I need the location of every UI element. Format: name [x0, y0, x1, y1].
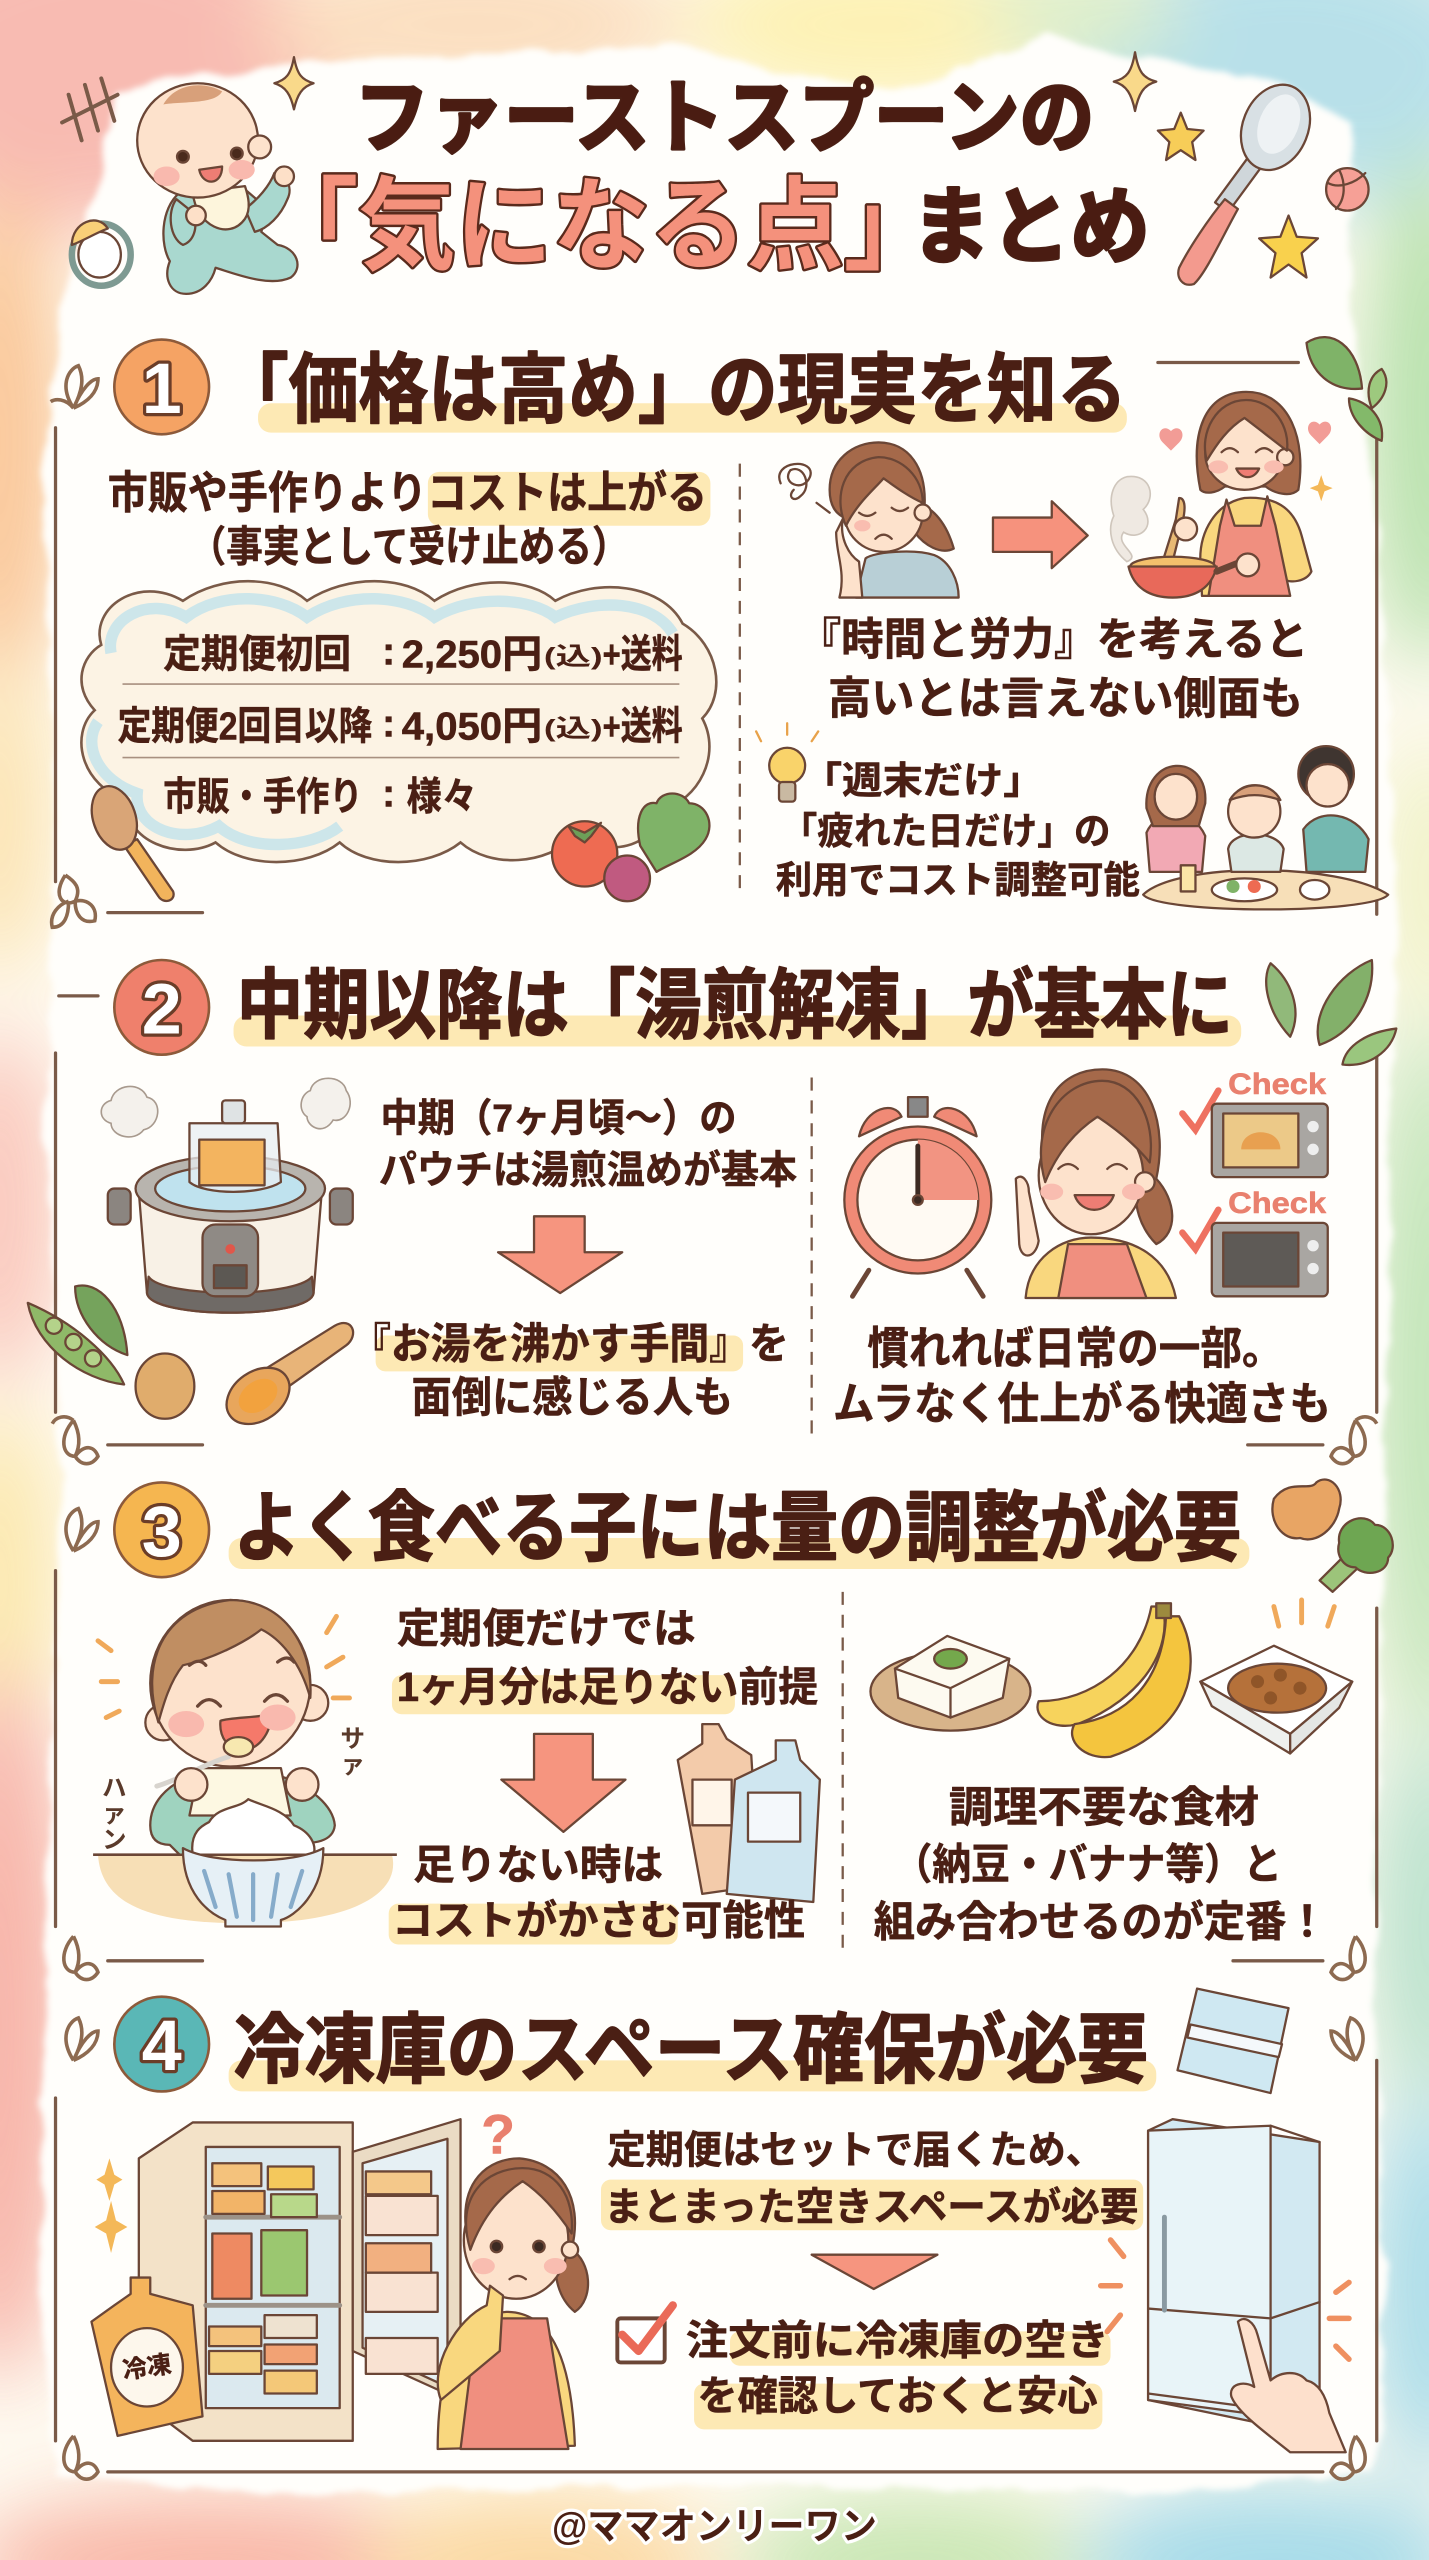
row 2: 定期便2回目以降 — [118, 706, 372, 749]
icon: pouches — [678, 1724, 820, 1902]
text: pouch: パウチは湯煎温めが基本 — [379, 1150, 797, 1193]
check microwave 2: Check — [1228, 1187, 1327, 1220]
divider — [842, 1592, 844, 1951]
price cloud — [81, 581, 716, 862]
row 3: 市販・手作り — [163, 776, 363, 819]
icon: family meal — [1143, 746, 1388, 909]
icon: broccoli — [1320, 1518, 1393, 1592]
highlight — [601, 2180, 1143, 2230]
number badge 3: 3 — [142, 1492, 182, 1572]
heading 4: 冷凍庫のスペース確保が必要 — [234, 2009, 1148, 2094]
text: boiling effort: 『お湯を沸かす手間』を — [351, 1320, 789, 1367]
icon: rice bowl — [183, 1799, 323, 1927]
divider — [811, 1078, 813, 1433]
text: troublesome: 面倒に感じる人も — [412, 1374, 733, 1421]
row 2: : — [382, 702, 395, 745]
heading 2: 中期以降は「湯煎解凍」が基本に — [237, 964, 1233, 1049]
icon: alarm clock — [844, 1097, 991, 1296]
icon: thinking woman — [438, 2158, 588, 2449]
saa: サ — [341, 1726, 365, 1753]
saa: ァ — [341, 1752, 365, 1779]
highlight — [376, 1336, 743, 1371]
row 1: : — [382, 630, 395, 673]
icon: steam clouds — [101, 1078, 350, 1137]
highlight — [389, 1904, 678, 1944]
row 3: 様々 — [407, 776, 477, 819]
section 2 — [28, 960, 1396, 1445]
haan: ァ — [102, 1801, 127, 1828]
section 1 frame — [56, 362, 1377, 914]
icon: frozen pouch — [91, 2278, 203, 2436]
row 1: (込) — [544, 642, 603, 670]
haan: ン — [102, 1827, 127, 1854]
leaves — [1266, 960, 1396, 1065]
attention marks — [1101, 2240, 1349, 2359]
leaves — [1307, 337, 1386, 441]
row 1: 定期便初回 — [163, 634, 351, 677]
number badge 4 — [114, 1997, 209, 2091]
row 2: 4,050円 — [402, 706, 542, 749]
arrow down — [498, 1216, 622, 1293]
frame ornaments — [51, 366, 1377, 2479]
sparkle marks — [1274, 1600, 1334, 1626]
row 1 — [163, 630, 683, 677]
title highlighted words: 「気になる点」 — [261, 170, 941, 283]
section 2 frame — [56, 996, 1377, 1445]
title line 2 suffix: まとめ — [911, 179, 1150, 274]
row 2 — [118, 702, 683, 749]
heading highlight — [234, 1016, 1241, 1047]
row 1: +送料 — [603, 634, 683, 677]
arrow down — [501, 1734, 625, 1832]
text: delivered as set: 定期便はセットで届くため、 — [608, 2129, 1104, 2172]
icon: table — [93, 1855, 397, 1923]
row 1: 2,250円 — [402, 634, 542, 677]
icon: fridge — [1148, 2119, 1320, 2429]
check microwave 1: Check — [1228, 1068, 1327, 1101]
icon: rattle lines — [62, 78, 118, 140]
section 4 — [56, 1989, 1377, 2472]
text: subscription only: 定期便だけでは — [397, 1605, 696, 1651]
text: accept as fact: （事実として受け止める） — [189, 524, 629, 571]
sparkle marks — [98, 1616, 349, 1718]
icon: open freezer — [139, 2119, 461, 2441]
icon: spoon — [1178, 74, 1322, 285]
highlight — [730, 2331, 1111, 2366]
sparkles — [95, 2158, 127, 2253]
text: routine: 慣れれば日常の一部。 — [867, 1324, 1284, 1373]
icon: rice cooker — [108, 1100, 353, 1313]
credit: @ママオンリーワン — [552, 2505, 877, 2547]
text: not expensive: 高いとは言えない側面も — [828, 674, 1303, 723]
text: one month: 1ヶ月分は足りない前提 — [397, 1664, 818, 1710]
icon: stress squiggle — [779, 464, 830, 513]
number badge 1 — [114, 340, 209, 434]
row 2: +送料 — [603, 706, 683, 749]
highlight — [392, 1675, 735, 1714]
section 4 frame — [56, 2060, 1377, 2472]
icon: baby — [137, 83, 297, 294]
icon: bulb — [756, 723, 818, 802]
row 2: (込) — [544, 714, 603, 742]
check microwave 2 — [1182, 1187, 1328, 1296]
row 3: : — [382, 773, 395, 816]
text: natto banana: （納豆・バナナ等）と — [893, 1841, 1282, 1888]
row 3 — [163, 773, 477, 819]
section 3 — [56, 1480, 1393, 1961]
number badge 3 — [114, 1482, 209, 1577]
heading 1: 「価格は高め」の現実を知る — [219, 348, 1127, 433]
icon: question mark: ? — [481, 2103, 515, 2165]
icon: pointing hand — [1231, 2319, 1346, 2452]
arrow triangle — [812, 2255, 937, 2289]
icon: sparkles and stars — [274, 52, 1369, 278]
heading highlight — [229, 2060, 1156, 2091]
onomatopoeia — [102, 1726, 365, 1854]
text: not enough: 足りない時は — [413, 1842, 663, 1888]
icon: pacifier — [72, 220, 131, 286]
icon: cooking woman — [1129, 392, 1311, 598]
section 3 frame — [56, 1571, 1377, 1961]
icon: hearts — [1159, 422, 1333, 501]
divider — [739, 464, 741, 895]
arrow right — [993, 501, 1088, 568]
icon: pea pod and leaf — [28, 1286, 127, 1384]
number badge 1: 1 — [142, 349, 182, 429]
title line 1: ファーストスプーンの — [354, 73, 1094, 162]
number badge 2: 2 — [142, 969, 182, 1049]
text: standard combo: 組み合わせるのが定番！ — [874, 1898, 1328, 1945]
text: evenly finished: ムラなく仕上がる快適さも — [833, 1380, 1331, 1429]
heading highlight — [258, 403, 1127, 433]
icon: steam — [1111, 476, 1150, 562]
title — [261, 73, 1150, 283]
icon: potato — [136, 1353, 194, 1419]
icon: tomato and radish — [552, 793, 709, 901]
icon: natto — [1200, 1646, 1352, 1753]
icon: bananas — [1037, 1603, 1191, 1757]
icon: tired woman — [830, 442, 959, 598]
text: tired days: 「疲れた日だけ」の — [781, 810, 1111, 852]
number badge 4: 4 — [142, 2006, 182, 2086]
text: weekends: 「週末だけ」 — [802, 759, 1044, 801]
haan: ハ — [102, 1775, 127, 1802]
check microwave 1 — [1182, 1068, 1328, 1177]
text: mid stage: 中期（7ヶ月頃〜）の — [381, 1097, 737, 1140]
text: time and labor: 『時間と労力』を考えると — [799, 616, 1308, 665]
text: cost goes up: 市販や手作りよりコストは上がる — [108, 469, 707, 518]
heading highlight — [229, 1538, 1249, 1569]
text: cost adjust: 利用でコスト調整可能 — [776, 859, 1140, 901]
icon: eating baby — [145, 1600, 335, 1855]
text: no cooking: 調理不要な食材 — [949, 1784, 1259, 1831]
section 1 — [56, 337, 1388, 914]
icon: frozen pack — [1177, 1989, 1289, 2093]
text: costly: コストがかさむ可能性 — [392, 1898, 805, 1944]
number badge 2 — [114, 960, 209, 1055]
icon: checkbox — [617, 2305, 673, 2362]
cloud shape — [81, 581, 716, 862]
text: check before order: 注文前に冷凍庫の空き — [686, 2317, 1109, 2363]
icon: wooden spoon — [84, 780, 174, 901]
icon: spoon — [216, 1323, 353, 1436]
icon: smiling woman — [1016, 1069, 1176, 1298]
text: peace of mind: を確認しておくと安心 — [697, 2373, 1098, 2419]
highlight cost — [428, 472, 710, 526]
highlight — [694, 2384, 1102, 2429]
icon: frozen pouch: 冷凍 — [121, 2350, 173, 2385]
text: need space: まとまった空きスペースが必要 — [604, 2186, 1138, 2229]
heading 3: よく食べる子には量の調整が必要 — [234, 1486, 1241, 1571]
icon: tofu — [870, 1636, 1031, 1731]
icon: walnut — [1272, 1480, 1341, 1539]
